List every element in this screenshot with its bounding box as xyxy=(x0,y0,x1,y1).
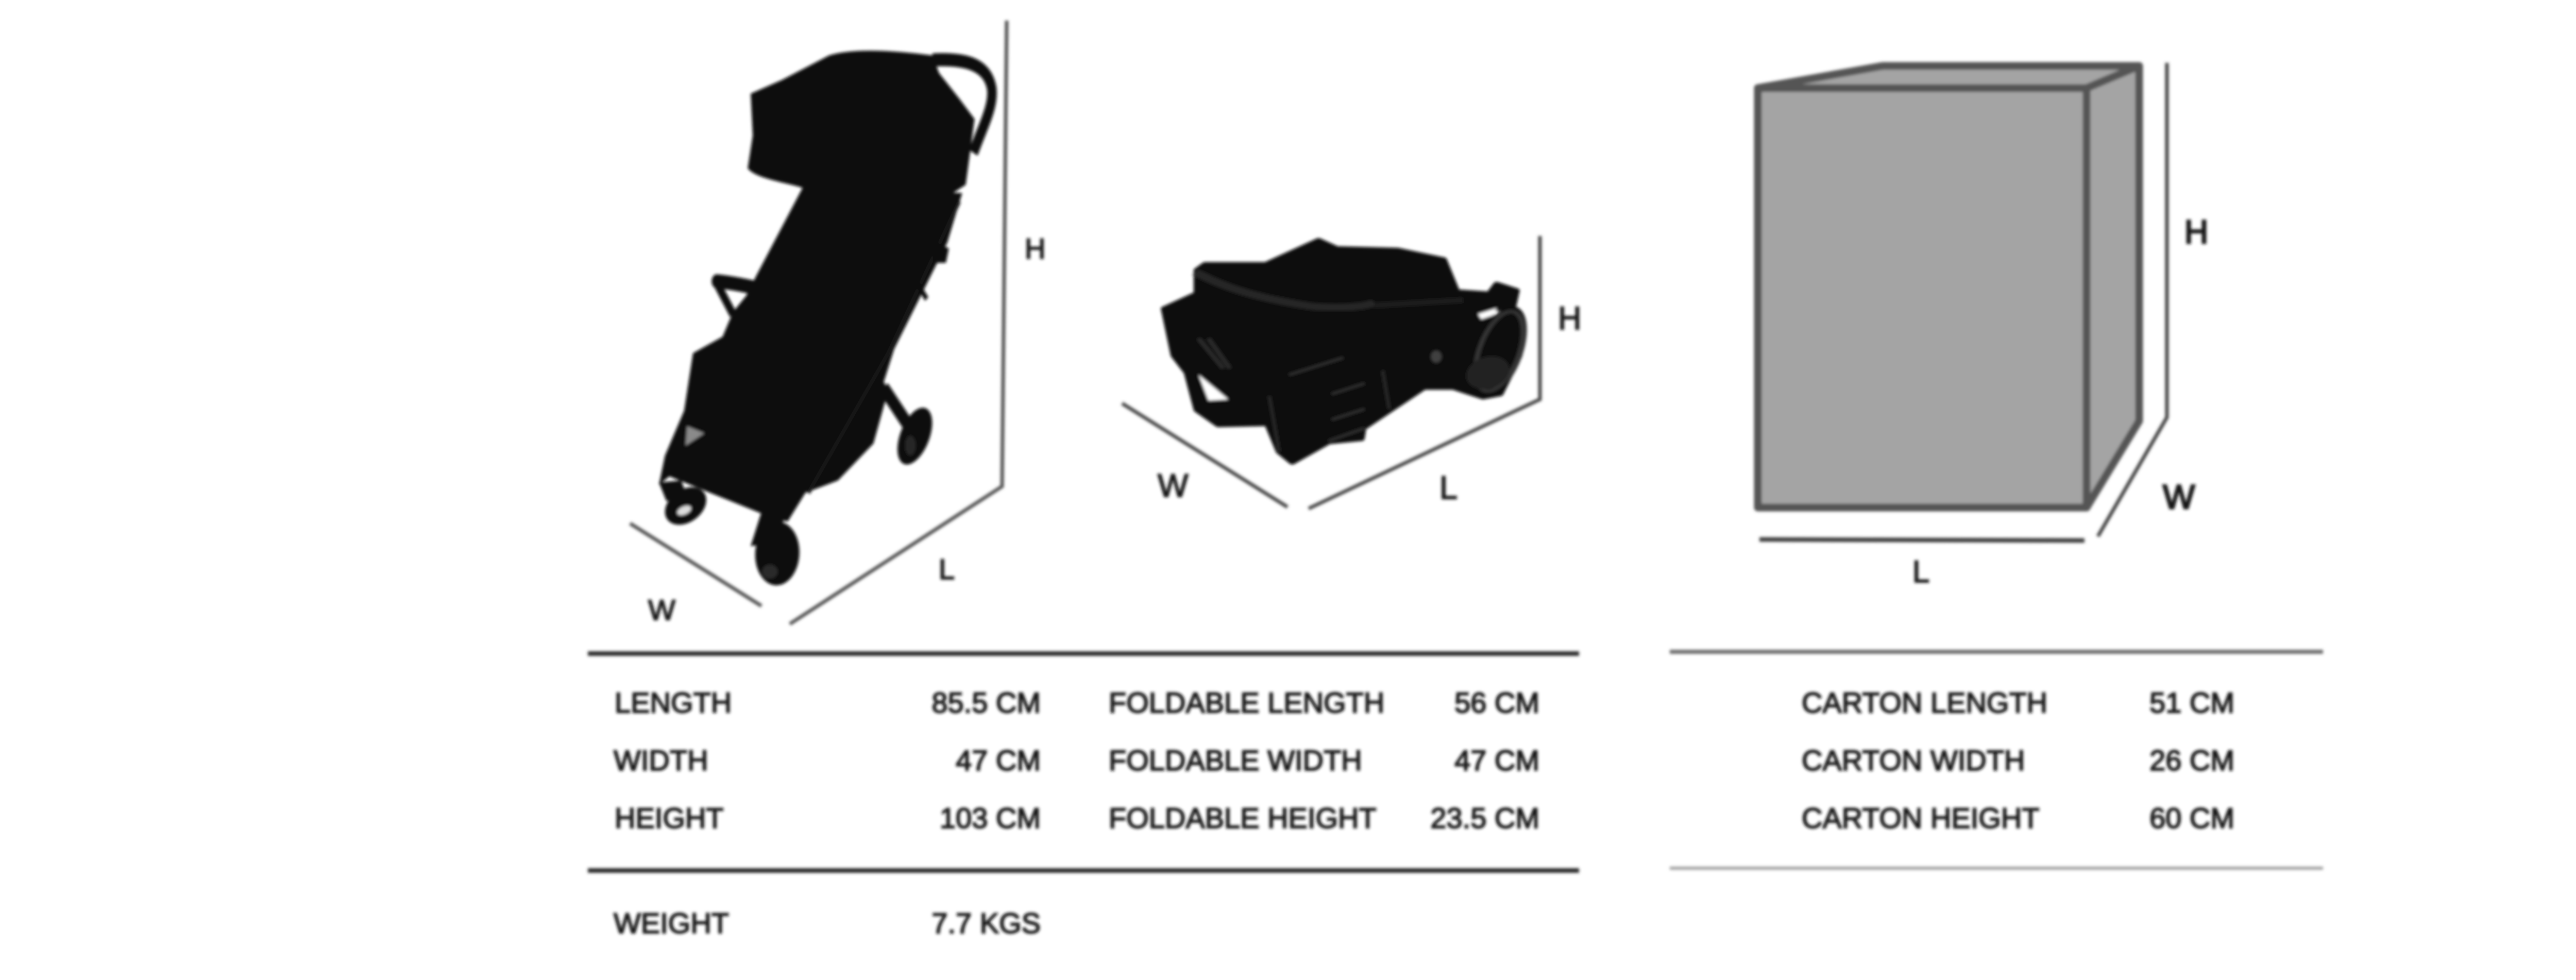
label: H: H xyxy=(1558,300,1582,336)
spec: width xyxy=(614,744,1041,776)
spec: height: 103 CM xyxy=(940,802,1041,834)
top rule xyxy=(1670,650,2323,654)
spec: weight: WEIGHT xyxy=(614,907,729,939)
spec: carton length xyxy=(1802,686,2234,719)
label: W: W xyxy=(648,594,675,626)
image: open stroller silhouette xyxy=(659,50,992,596)
spec: length: LENGTH xyxy=(615,686,732,719)
panel: open stroller diagram xyxy=(630,21,1045,626)
spec: foldable height: FOLDABLE HEIGHT xyxy=(1109,802,1377,834)
spec: carton width: CARTON WIDTH xyxy=(1802,744,2025,776)
spec: carton height xyxy=(1802,802,2234,834)
panel: carton diagram xyxy=(1758,63,2208,589)
spec: foldable width: 47 CM xyxy=(1454,744,1539,776)
label: L: L xyxy=(939,553,955,585)
spec: carton width xyxy=(1802,744,2234,776)
image: folded stroller silhouette xyxy=(1164,240,1537,462)
spec: foldable height xyxy=(1109,802,1539,834)
panel: folded stroller diagram xyxy=(1122,236,1582,509)
top rule xyxy=(588,651,1579,656)
spec: width: 47 CM xyxy=(956,744,1041,776)
icon: carton box xyxy=(1758,66,2139,508)
dimension lines: open stroller xyxy=(630,21,1007,624)
label: L: L xyxy=(1439,470,1458,506)
spec: height xyxy=(615,802,1041,834)
label: H: H xyxy=(2184,213,2208,250)
panel: stroller specifications table xyxy=(588,651,1579,939)
spec: foldable length xyxy=(1109,686,1539,719)
spec: carton height: CARTON HEIGHT xyxy=(1802,802,2040,834)
label: W: W xyxy=(1158,468,1189,504)
spec: length xyxy=(615,686,1041,719)
spec: foldable length: 56 CM xyxy=(1454,686,1539,719)
spec: foldable length: FOLDABLE LENGTH xyxy=(1109,686,1384,719)
spec: weight: 7.7 KGS xyxy=(931,907,1041,939)
spec: foldable width: FOLDABLE WIDTH xyxy=(1109,744,1362,776)
label: W: W xyxy=(2163,478,2195,516)
dimension lines: folded stroller xyxy=(1122,236,1540,509)
panel: carton specifications table xyxy=(1670,650,2323,870)
spec: weight xyxy=(614,907,1041,939)
spec: foldable height: 23.5 CM xyxy=(1430,802,1539,834)
spec: carton height: 60 CM xyxy=(2149,802,2234,834)
bottom rule xyxy=(588,868,1579,873)
spec: height: HEIGHT xyxy=(615,802,724,834)
spec: carton length: CARTON LENGTH xyxy=(1802,686,2047,719)
spec: carton length: 51 CM xyxy=(2149,686,2234,719)
spec: carton width: 26 CM xyxy=(2149,744,2234,776)
spec: width: WIDTH xyxy=(614,744,708,776)
label: H: H xyxy=(1025,232,1045,265)
spec: foldable width xyxy=(1109,744,1539,776)
spec: length: 85.5 CM xyxy=(931,686,1041,719)
label: L: L xyxy=(1912,554,1929,589)
bottom rule xyxy=(1670,867,2323,870)
dimension lines: carton xyxy=(1759,63,2167,540)
